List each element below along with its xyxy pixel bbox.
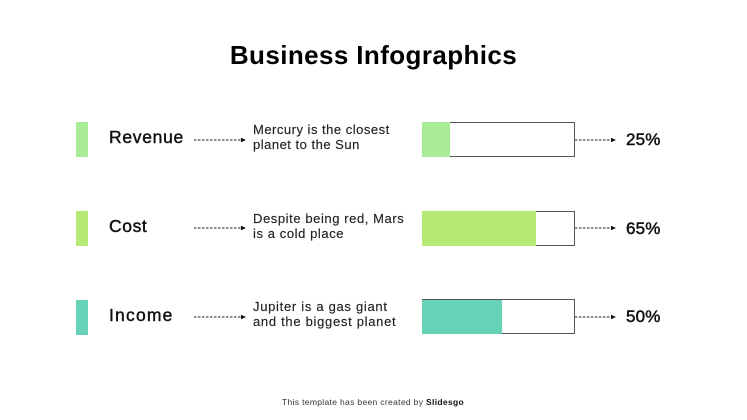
- arrow: revenue to value: [575, 138, 616, 142]
- bar fill: revenue: [422, 122, 450, 157]
- title: Business Infographics: [230, 40, 517, 70]
- bar fill: income: [422, 300, 502, 334]
- footer credit: This template has been created by Slidesgo: [282, 397, 464, 407]
- colour marker: revenue: [76, 122, 88, 157]
- description: income: Jupiter is a gas giant: [253, 299, 388, 314]
- arrow: revenue to description: [194, 138, 246, 142]
- description: income: and the biggest planet: [253, 314, 396, 329]
- arrow: income to description: [194, 314, 246, 320]
- bar fill: cost: [422, 211, 536, 246]
- colour marker: income: [76, 300, 88, 335]
- arrow: cost to value: [575, 226, 616, 230]
- row: income: [76, 299, 661, 335]
- description: income: [253, 299, 396, 329]
- description: revenue: planet to the Sun: [253, 137, 360, 152]
- row: cost: [76, 211, 661, 246]
- value: revenue: 25%: [626, 130, 661, 149]
- description: cost: [253, 211, 404, 241]
- bar: revenue 25%: [422, 122, 575, 157]
- description: revenue: [253, 122, 390, 152]
- label: revenue: Revenue: [109, 127, 184, 147]
- bar: cost 65%: [422, 211, 575, 246]
- label: cost: Cost: [109, 216, 147, 236]
- row: revenue: [76, 122, 661, 157]
- arrow: income to value: [575, 314, 616, 320]
- value: income: 50%: [626, 307, 661, 326]
- colour marker: cost: [76, 211, 88, 246]
- value: cost: 65%: [626, 219, 661, 238]
- bar: income 50%: [422, 299, 575, 334]
- description: cost: Despite being red, Mars: [253, 211, 404, 226]
- arrow: cost to description: [194, 226, 246, 230]
- description: revenue: Mercury is the closest: [253, 122, 390, 137]
- description: cost: is a cold place: [253, 226, 344, 241]
- label: income: Income: [109, 305, 174, 325]
